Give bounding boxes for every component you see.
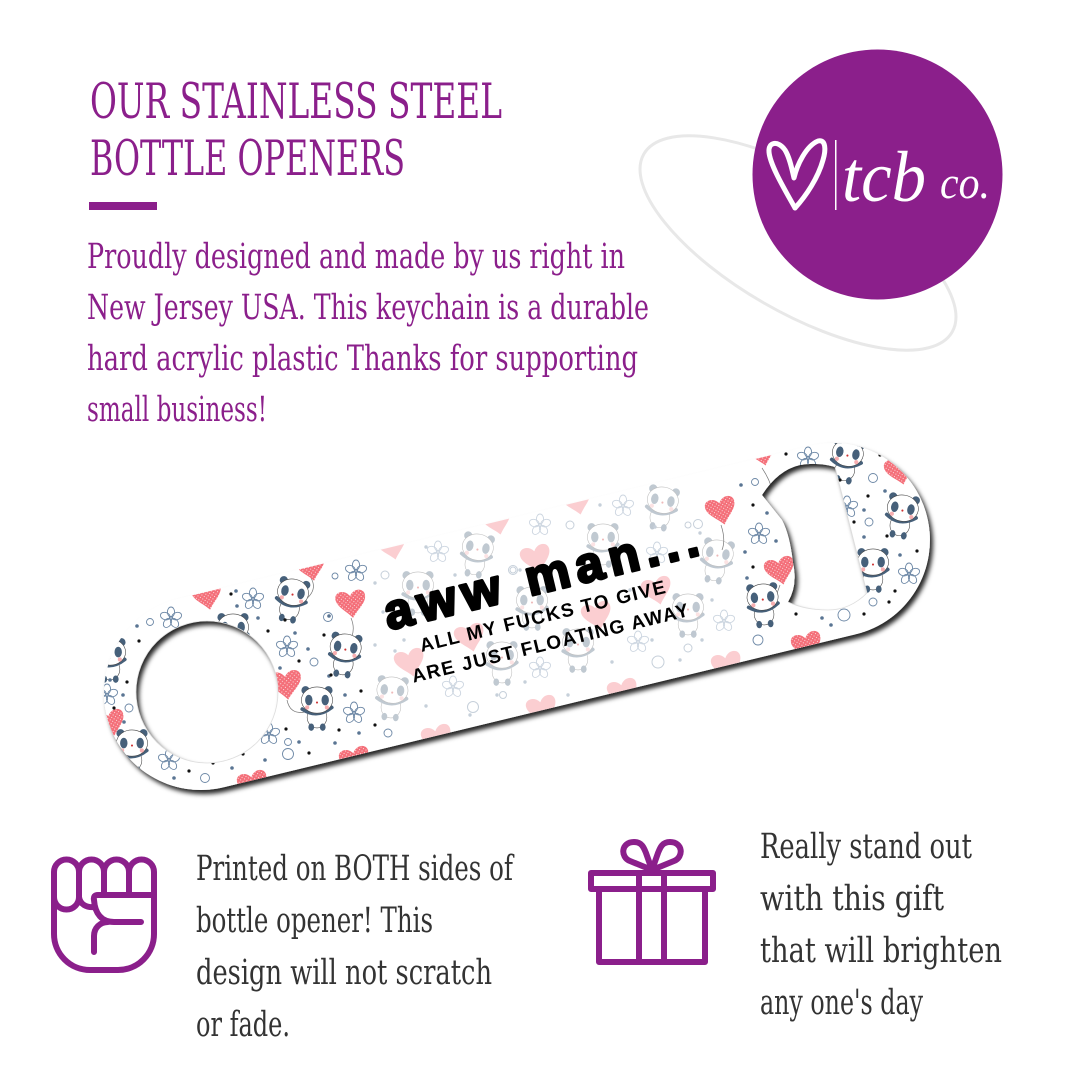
- feature text: gift: any one's day: [760, 983, 923, 1023]
- faded center pattern: [373, 484, 745, 756]
- intro text block: hard acrylic plastic Thanks for supporting: [87, 339, 638, 379]
- feature text: gift: [760, 827, 1002, 1023]
- feature text: gift: Really stand out: [760, 827, 972, 867]
- intro text block: [87, 237, 649, 430]
- heading: our stainless steel bottle openers: OUR STAINLESS STEEL: [90, 73, 502, 130]
- feature text: printed both sides: Printed on BOTH sides of: [196, 849, 515, 889]
- icon: gift box: [591, 842, 713, 962]
- intro text block: Proudly designed and made by us right in: [87, 237, 625, 277]
- intro text block: New Jersey USA. This keychain is a durable: [87, 288, 649, 328]
- logo wordmark: tcb: [842, 137, 926, 217]
- balloon strings: [287, 468, 780, 712]
- panda balloon pattern: [92, 436, 921, 802]
- heading: our stainless steel bottle openers: BOTTLE OPENERS: [90, 130, 405, 187]
- feature text: printed both sides: [196, 849, 515, 1045]
- icon: raised fist: [54, 860, 154, 970]
- opener slogan: aww man...: [378, 511, 704, 641]
- opener slogan: [378, 511, 716, 690]
- logo wordmark: co.: [940, 157, 990, 208]
- heading accent bar: [89, 202, 157, 210]
- pandas: [94, 437, 921, 774]
- opener slogan: ARE JUST FLOATING AWAY: [410, 600, 691, 688]
- dark hearts: [104, 454, 920, 784]
- logo badge: [752, 50, 1002, 300]
- flowers: [95, 447, 921, 771]
- logo wordmark: [842, 137, 990, 217]
- logo divider: [835, 140, 836, 210]
- feature text: printed both sides: or fade.: [196, 1005, 290, 1045]
- feature text: gift: that will brighten: [760, 931, 1002, 971]
- intro text block: small business!: [87, 390, 267, 430]
- heading: our stainless steel bottle openers: [90, 73, 502, 187]
- icon: logo heart: [769, 141, 825, 208]
- feature text: printed both sides: design will not scratch: [196, 953, 492, 993]
- decorative orbit ellipse behind logo: [609, 94, 987, 392]
- opener body with shadow: [104, 443, 930, 790]
- dots: [108, 483, 902, 780]
- feature text: printed both sides: bottle opener! This: [196, 901, 433, 941]
- opener slogan: ALL MY FUCKS TO GIVE: [418, 577, 668, 657]
- hole edge hairlines: [136, 467, 867, 763]
- small rings: [125, 474, 878, 782]
- feature text: gift: with this gift: [760, 879, 944, 919]
- bottle opener: [92, 436, 930, 802]
